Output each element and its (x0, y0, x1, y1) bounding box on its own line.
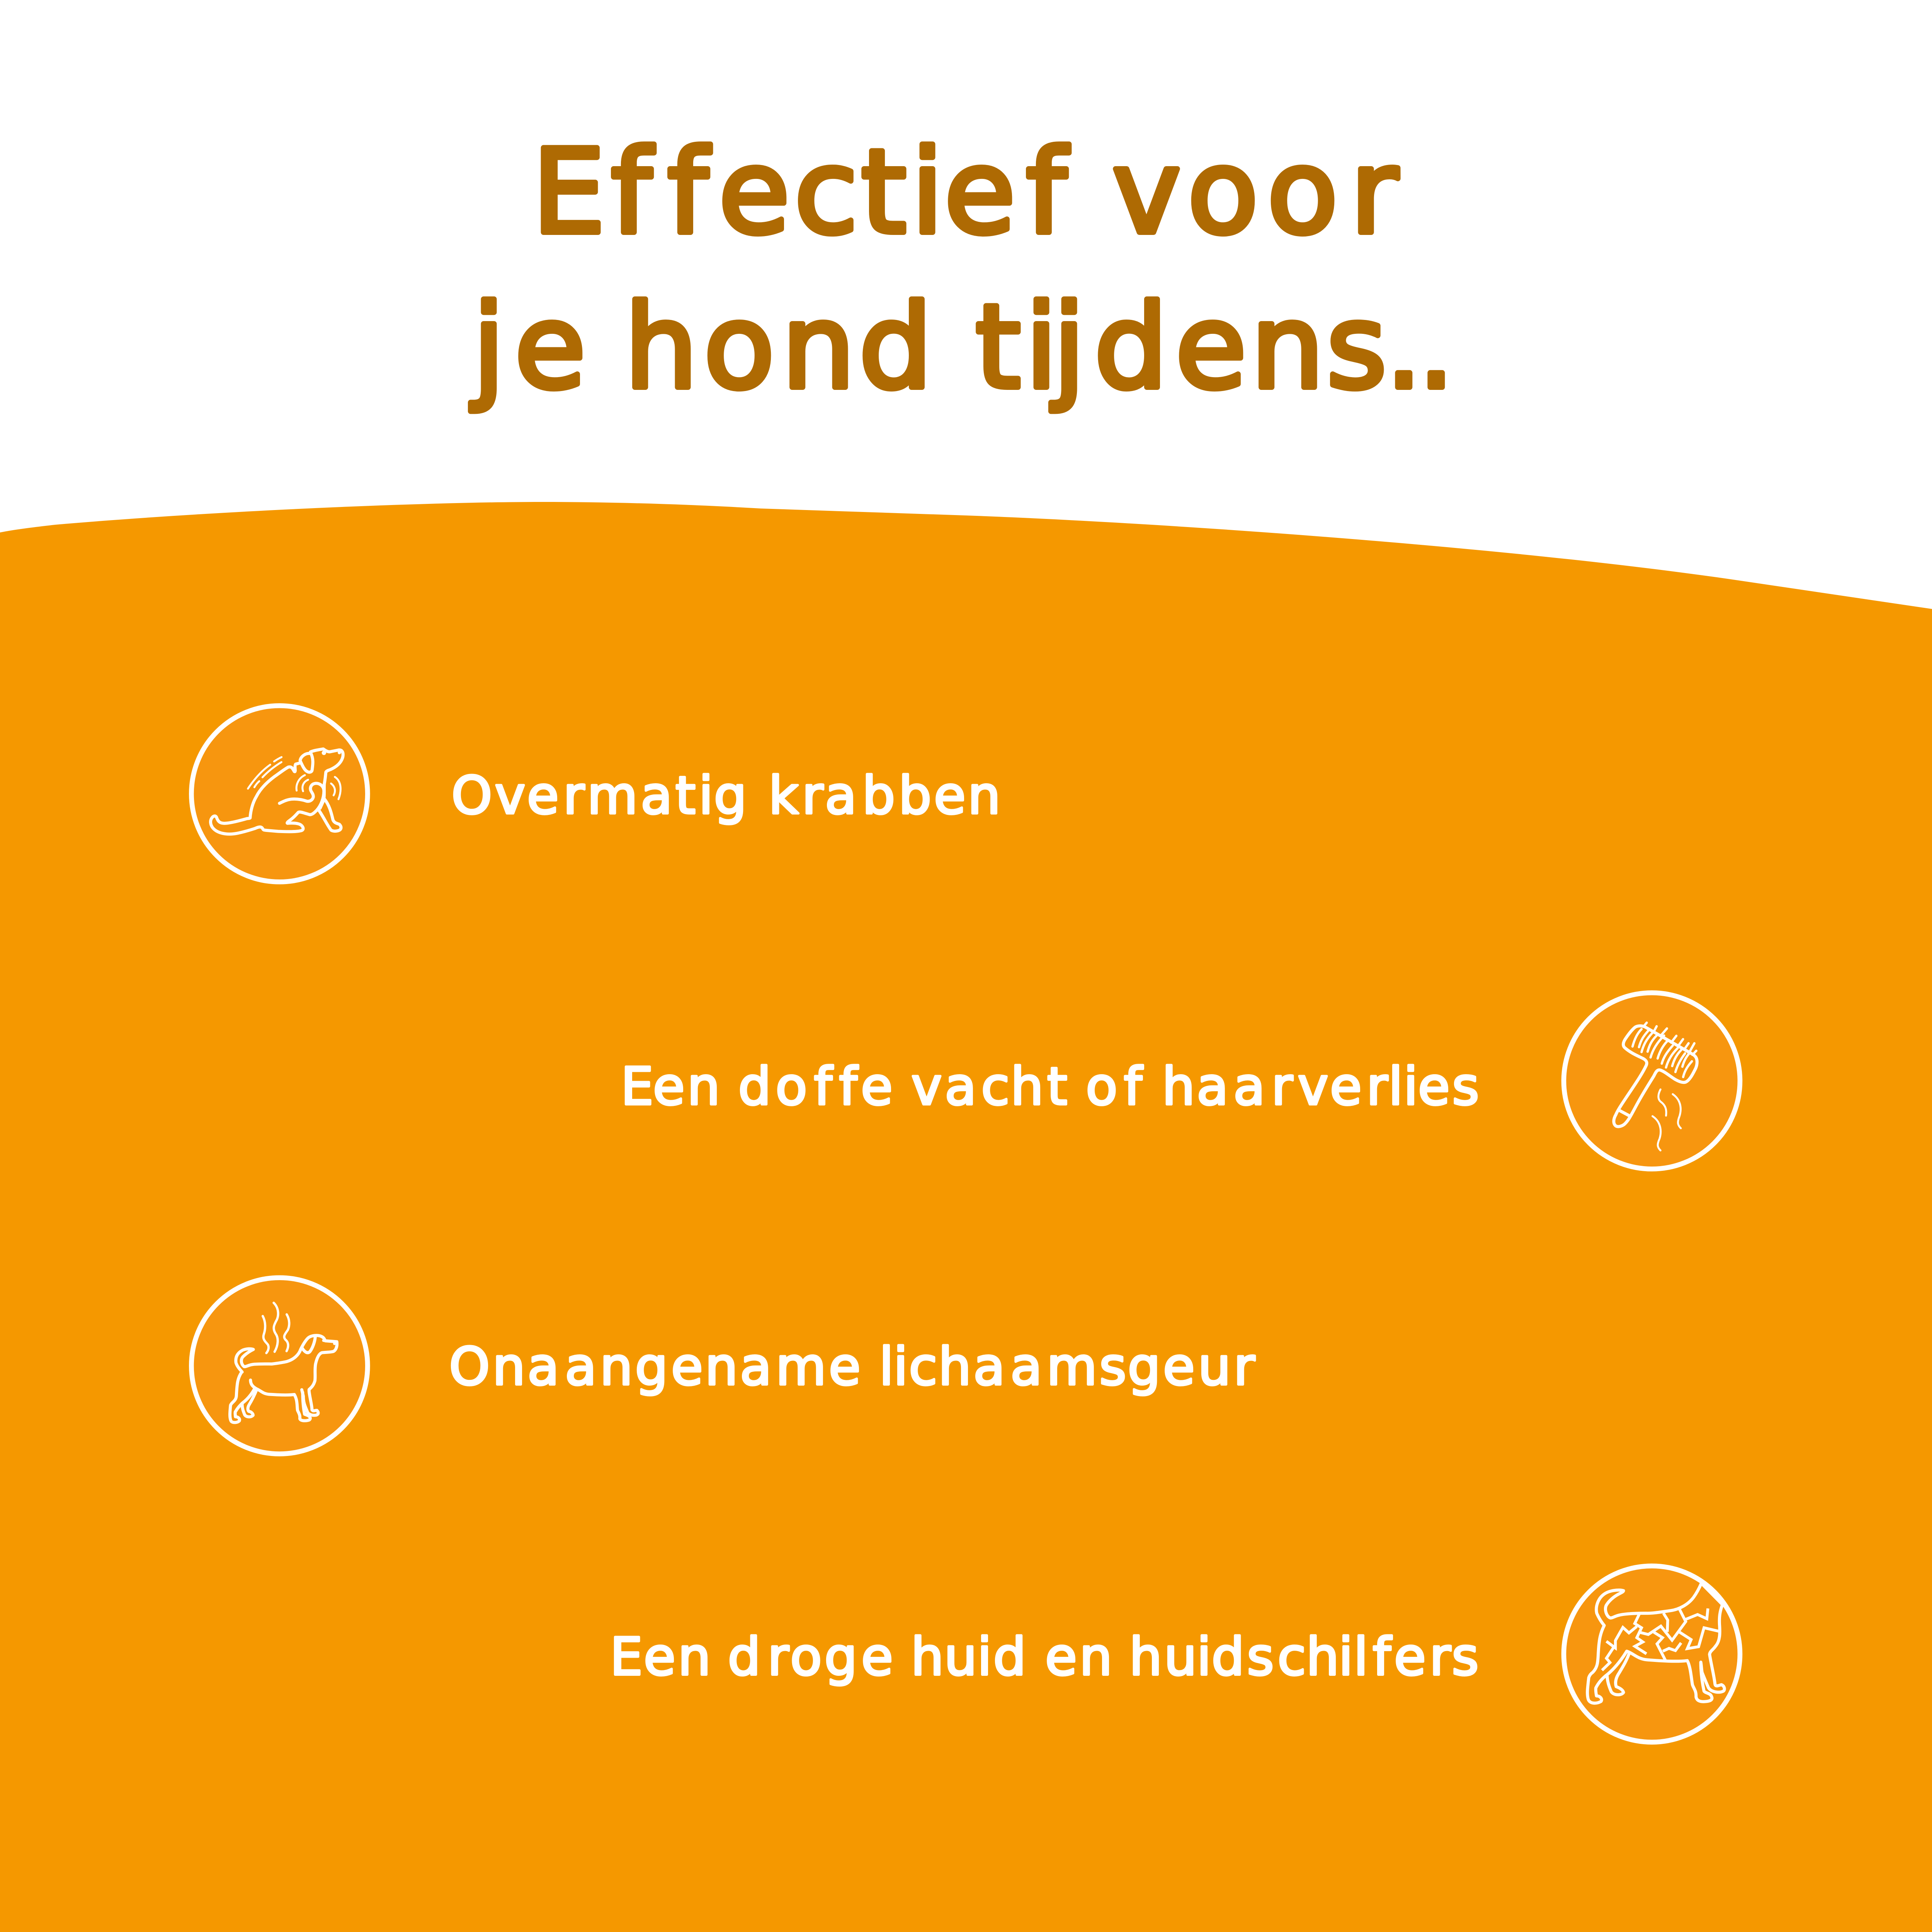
title (469, 125, 1455, 415)
label: doffe vacht: Een doffe vacht of haarverlies (621, 1056, 1479, 1117)
label: lichaamsgeur: Onaangename lichaamsgeur (449, 1337, 1255, 1397)
label: droge huid: Een droge huid en huidschilfers (610, 1627, 1479, 1687)
title: je hond tijdens.. (469, 280, 1455, 415)
icon: dog with cracked dry skin (1564, 1566, 1740, 1742)
icon: scratching dog (191, 706, 367, 882)
icon: smelly dog (191, 1278, 367, 1454)
icon: brush with loose hair (1564, 993, 1740, 1169)
label: overmatig krabben: Overmatig krabben (451, 765, 1000, 826)
title: Effectief voor (532, 125, 1399, 260)
orange wave panel (0, 502, 1932, 1932)
